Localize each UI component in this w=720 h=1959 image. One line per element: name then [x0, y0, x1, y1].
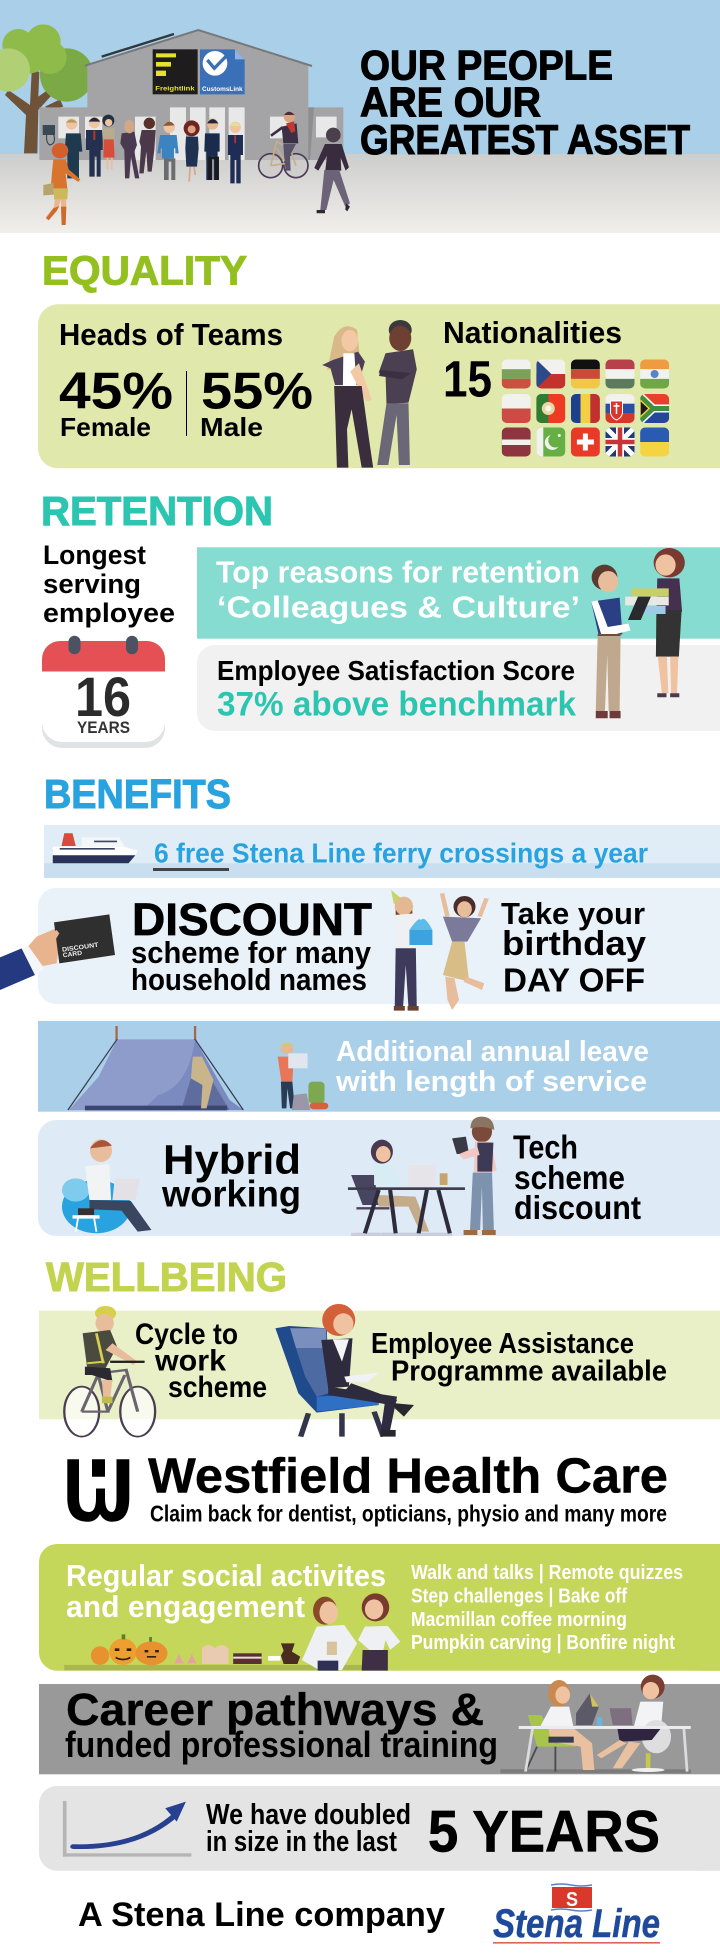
panel: discount and birthday: DAY OFF	[503, 962, 645, 999]
panel: doubled in size: in size in the last	[206, 1826, 397, 1858]
icon: man on beanbag	[62, 1139, 151, 1233]
panel: ferry crossings	[44, 825, 720, 878]
panel: cycle to work and employee assistance: Cycle to	[135, 1318, 238, 1351]
panel: discount and birthday: household names	[131, 962, 367, 997]
heading: equality: EQUALITY	[42, 247, 247, 293]
icon: colleagues with folders	[591, 548, 685, 718]
stena line logo: S	[566, 1889, 578, 1911]
longest serving employee text	[43, 540, 175, 628]
panel: ferry crossings: 6 free Stena Line ferry crossings a year	[154, 838, 648, 869]
panel: career pathways: Career pathways &	[66, 1684, 484, 1735]
heading: benefits: BENEFITS	[44, 771, 231, 817]
panel: hybrid working and tech scheme: working	[161, 1174, 301, 1215]
activities list: Walk and talks | Remote quizzes	[411, 1561, 683, 1584]
icon: birthday man and jumping woman	[391, 890, 487, 1011]
heads of teams stats: 45%	[59, 362, 173, 420]
CustomsLink sign	[200, 49, 245, 94]
panel: cycle to work and employee assistance: work	[154, 1345, 226, 1378]
panel: discount and birthday: birthday	[502, 925, 646, 963]
panel: regular social activities	[39, 1544, 720, 1671]
longest serving employee text: Longest	[43, 540, 146, 570]
flags grid	[502, 360, 669, 456]
header illustration panel	[0, 0, 720, 233]
panel: hybrid working and tech scheme: Hybrid	[163, 1136, 301, 1183]
heads of teams stats: Male	[200, 412, 263, 442]
panel: cycle to work and employee assistance: Employee Assistance	[371, 1328, 634, 1360]
stena line company text: A Stena Line company	[78, 1896, 445, 1934]
icon: tent and hiker	[68, 1026, 328, 1110]
panel: additional annual leave: Additional annual leave	[336, 1036, 649, 1068]
panel: top reasons for retention	[197, 547, 720, 639]
longest serving employee text: employee	[43, 598, 175, 628]
icon: calendar 16 years	[42, 636, 165, 748]
heading: retention: RETENTION	[41, 488, 273, 534]
icon: woman in blue armchair	[275, 1304, 414, 1437]
heads of teams stats: Heads of Teams	[59, 317, 283, 352]
chart: growth arrow	[63, 1801, 191, 1857]
activities list: Macmillan coffee morning	[411, 1608, 627, 1631]
panel: discount and birthday	[38, 888, 720, 1004]
icon: calendar 16 years: 16	[75, 665, 131, 728]
panel: equality	[38, 304, 720, 468]
icon: pumpkins, cakes, colleagues	[64, 1593, 400, 1671]
panel: doubled in size: 5 YEARS	[428, 1800, 660, 1865]
panel: top reasons for retention: Top reasons for retention	[216, 555, 580, 590]
panel: discount and birthday: scheme for many	[131, 935, 372, 970]
icon: meeting at desk	[500, 1675, 691, 1773]
activities list: Step challenges | Bake off	[411, 1585, 627, 1608]
icon: man with tablet	[452, 1117, 497, 1235]
woman with bag	[43, 143, 80, 225]
panel: regular social activities: Regular social activites	[66, 1558, 386, 1593]
panel: hybrid working and tech scheme: scheme	[514, 1159, 625, 1196]
heads of teams stats	[59, 317, 313, 442]
activities list	[411, 1561, 683, 1654]
panel: employee satisfaction score: 37% above benchmark	[217, 686, 576, 724]
panel: additional annual leave: with length of service	[335, 1066, 647, 1098]
panel: employee satisfaction score: Employee Satisfaction Score	[217, 655, 575, 686]
panel: doubled in size	[39, 1786, 720, 1871]
icon: woman at desk	[348, 1140, 465, 1236]
activities list: Pumpkin carving | Bonfire night	[411, 1631, 675, 1654]
westfield health care text: Westfield Health Care	[148, 1450, 668, 1504]
panel: hybrid working and tech scheme: Tech	[513, 1128, 578, 1165]
westfield health care text	[148, 1450, 668, 1527]
cyclist	[259, 111, 308, 178]
panel: cycle to work and employee assistance: scheme	[168, 1371, 267, 1404]
panel: hybrid working and tech scheme: discount	[514, 1189, 641, 1226]
panel: cycle to work and employee assistance: Programme available	[391, 1356, 667, 1388]
panel: additional annual leave	[38, 1021, 720, 1112]
panel: doubled in size: We have doubled	[206, 1799, 411, 1831]
heads of teams stats: 55%	[201, 362, 313, 420]
icon: cyclist	[64, 1306, 155, 1437]
longest serving employee text: serving	[43, 569, 141, 599]
panel: discount and birthday: Take your	[501, 896, 645, 931]
panel: hybrid working and tech scheme	[38, 1117, 720, 1236]
nationalities count: 15	[443, 351, 492, 408]
title: ARE OUR	[360, 79, 541, 126]
icon: hand holding discount card: CARD	[62, 950, 83, 959]
westfield health care logo	[67, 1459, 129, 1522]
panel: top reasons for retention: ‘Colleagues & Culture’	[217, 590, 580, 625]
icon: calendar 16 years: YEARS	[77, 718, 130, 737]
title: OUR PEOPLE	[360, 41, 613, 88]
heads of teams stats: Female	[60, 412, 151, 442]
title	[360, 41, 690, 163]
walking man	[314, 128, 350, 213]
icon: hand holding discount card: DISCOUNT	[62, 942, 99, 954]
scene: tree, warehouse and staff	[0, 24, 350, 225]
panel: career pathways: funded professional training	[65, 1724, 498, 1765]
stena line logo: Stena Line	[493, 1902, 660, 1946]
staff group	[65, 115, 243, 183]
panel: career pathways	[39, 1675, 720, 1774]
panel: employee satisfaction score	[197, 645, 720, 731]
Freightlink sign	[153, 49, 198, 94]
icon: hand holding discount card	[0, 914, 115, 990]
heading: wellbeing: WELLBEING	[46, 1254, 287, 1300]
CustomsLink sign: CustomsLink	[202, 87, 243, 93]
icon: ferry	[53, 833, 138, 863]
stena line logo	[493, 1884, 660, 1946]
panel: regular social activities: and engagement	[66, 1589, 305, 1624]
nationalities: Nationalities	[443, 315, 622, 350]
Freightlink sign: Freightlink	[155, 86, 195, 93]
icon: woman and man	[322, 320, 417, 468]
panel: discount and birthday: DISCOUNT	[132, 894, 372, 945]
panel: cycle to work and employee assistance	[39, 1306, 720, 1437]
